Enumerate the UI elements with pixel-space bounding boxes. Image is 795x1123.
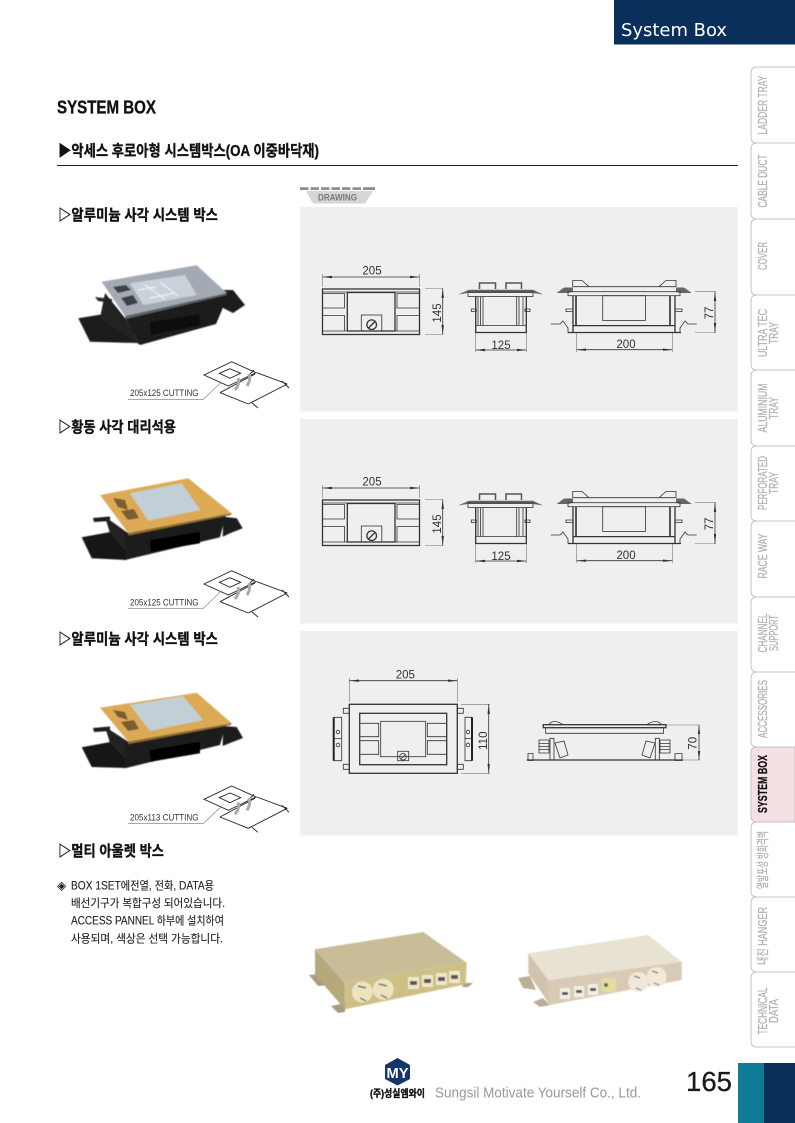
header banner bbox=[614, 0, 795, 44]
end view drawing: 125 bbox=[491, 551, 511, 563]
tab: race way: RACE WAY bbox=[756, 533, 770, 578]
cutting diagram 3 bbox=[128, 786, 289, 832]
panel: drawing 1 bbox=[300, 207, 738, 412]
product photo: aluminium system box bbox=[78, 265, 245, 345]
tab: seismic hanger bbox=[751, 897, 795, 972]
company tagline: Sungsil Motivate Yourself Co., Ltd. bbox=[435, 1086, 641, 1102]
end view drawing bbox=[458, 494, 543, 563]
product photo: outlet box right bbox=[518, 935, 682, 1007]
section heading: ▶악세스 후로아형 시스템박스(OA 이중바닥재) bbox=[58, 142, 319, 160]
drawing tab bbox=[300, 187, 375, 204]
top view drawing: 145 bbox=[432, 514, 444, 534]
tab: channel support: SUPPORT bbox=[767, 615, 781, 651]
multi outlet description bbox=[57, 878, 225, 946]
top view drawing: 145 bbox=[432, 303, 444, 323]
top view drawing: 205 bbox=[362, 476, 382, 488]
side view drawing bbox=[551, 492, 716, 563]
tab: accessories: ACCESSORIES bbox=[756, 680, 770, 738]
tab: aluminium tray: TRAY bbox=[767, 397, 781, 419]
tab: system box active: SYSTEM BOX bbox=[756, 755, 770, 813]
cutting diagram 2 bbox=[128, 571, 289, 617]
icon: company logo: MY bbox=[386, 1065, 408, 1082]
tab: seismic hanger: 내진 HANGER bbox=[756, 907, 770, 965]
tab: ultra tec tray: ULTRA TEC bbox=[756, 309, 770, 357]
tab: cover: COVER bbox=[756, 242, 770, 270]
heading: brass box: ▷황동 사각 대리석용 bbox=[58, 419, 176, 436]
side view drawing bbox=[527, 722, 700, 760]
tab: cable duct bbox=[751, 143, 795, 219]
cutting diagram 1 bbox=[128, 362, 289, 408]
panel: drawing 2 bbox=[300, 419, 738, 624]
icon: company logo bbox=[385, 1058, 410, 1086]
tab: fire barrier bbox=[751, 822, 795, 897]
tab: accessories bbox=[751, 672, 795, 747]
top view drawing bbox=[334, 669, 490, 773]
top view drawing: 205 bbox=[396, 669, 415, 681]
side view drawing: 77 bbox=[704, 307, 716, 319]
tab: aluminium tray bbox=[751, 370, 795, 446]
sidebar tabs bbox=[751, 67, 795, 1047]
tab: ladder tray bbox=[751, 67, 795, 143]
product photo: aluminium box with gold plate bbox=[82, 693, 243, 768]
product photo: brass box bbox=[82, 478, 243, 560]
top view drawing bbox=[322, 266, 444, 334]
heading: multi outlet box: ▷멀티 아울렛 박스 bbox=[58, 842, 164, 860]
top view drawing: 205 bbox=[362, 266, 382, 278]
tab: technical data: DATA bbox=[767, 998, 781, 1023]
header banner: System Box bbox=[621, 20, 727, 41]
cutting diagram 1: 205x125 CUTTING bbox=[130, 388, 198, 399]
product photo: outlet box left bbox=[309, 932, 473, 1013]
tab: channel support bbox=[751, 597, 795, 672]
heading: aluminium box 2: ▷알루미늄 사각 시스템 박스 bbox=[58, 631, 218, 648]
tab: system box active bbox=[751, 747, 795, 822]
cutting diagram 3: 205x113 CUTTING bbox=[130, 813, 198, 824]
tab: cover bbox=[751, 219, 795, 295]
page number: 165 bbox=[686, 1066, 732, 1097]
multi outlet description: ACCESS PANNEL 하부에 설치하여 bbox=[71, 914, 224, 928]
side view drawing: 200 bbox=[616, 550, 636, 562]
tab: perforated tray: PERFORATED bbox=[756, 456, 770, 510]
tab: cable duct: CABLE DUCT bbox=[756, 154, 770, 208]
title: SYSTEM BOX bbox=[57, 96, 157, 118]
tab: ladder tray: LADDER TRAY bbox=[756, 75, 770, 134]
tab: technical data bbox=[751, 972, 795, 1047]
side view drawing bbox=[551, 280, 716, 352]
multi outlet description: BOX 1SET에전열, 전화, DATA용 bbox=[71, 880, 214, 892]
drawing tab: DRAWING bbox=[318, 193, 357, 203]
tab: race way bbox=[751, 521, 795, 597]
multi outlet description: 배선기구가 복합구성 되어있습니다. bbox=[71, 897, 225, 910]
top view drawing: 110 bbox=[478, 732, 490, 750]
cutting diagram 2: 205x125 CUTTING bbox=[130, 598, 198, 608]
tab: perforated tray: TRAY bbox=[767, 472, 781, 494]
tab: technical data: TECHNICAL bbox=[756, 987, 770, 1034]
footer colour blocks bbox=[738, 1063, 795, 1123]
heading: aluminium box 1: ▷알루미늄 사각 시스템 박스 bbox=[58, 207, 218, 224]
tab: ultra tec tray bbox=[751, 295, 795, 370]
tab: fire barrier: 열발포성 방화격벽 bbox=[756, 831, 770, 889]
multi outlet description: 사용되며, 색상은 선택 가능합니다. bbox=[71, 932, 223, 946]
end view drawing bbox=[458, 283, 543, 352]
multi outlet description: ◈ bbox=[57, 878, 67, 892]
top view drawing bbox=[322, 476, 444, 546]
side view drawing: 77 bbox=[704, 518, 716, 530]
tab: channel support: CHANNEL bbox=[756, 613, 770, 652]
panel: drawing 3 bbox=[300, 631, 738, 836]
tab: perforated tray bbox=[751, 446, 795, 521]
side view drawing: 70 bbox=[688, 737, 700, 750]
end view drawing: 125 bbox=[491, 340, 511, 352]
company name: (주)성실엠와이 bbox=[370, 1087, 425, 1100]
tab: ultra tec tray: TRAY bbox=[767, 322, 781, 344]
tab: aluminium tray: ALUMINIUM bbox=[756, 384, 770, 432]
side view drawing: 200 bbox=[616, 339, 636, 351]
